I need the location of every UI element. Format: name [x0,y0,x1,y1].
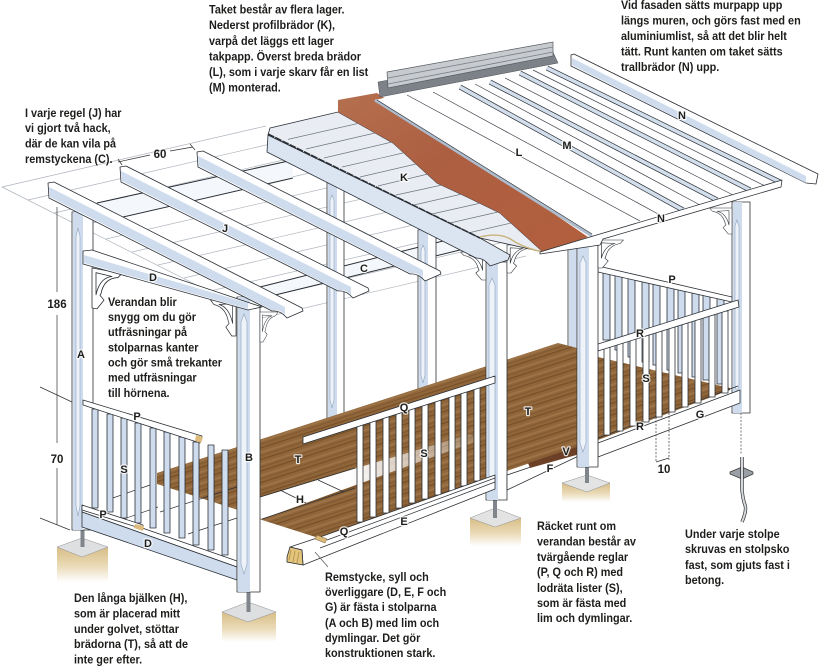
text: roof layers: takpapp. Överst breda brädor [209,50,362,64]
text: railing: verandan består av [537,536,637,549]
part letters: R [636,328,644,340]
part letters: H [296,494,304,506]
text: post shoe: fast, som gjuts fast i [685,560,790,572]
text: facade [621,0,801,74]
dimension 60: 60 [154,149,166,161]
text: post shoe: skruvas en stolpsko [685,544,789,556]
foundation block: middle [470,498,521,546]
part letters: L [516,147,523,159]
text: railing: lodräta lister (S), [537,583,623,595]
text: railing: tvärgående reglar [537,552,629,564]
text: roof layers: Nederst profilbrädor (K), [209,20,335,32]
front cross strip C [260,240,460,297]
top board N [571,54,818,184]
thin board joints [407,70,765,221]
part letters: N [678,110,686,122]
part letters: R [636,421,644,433]
rear cross strip C [97,160,293,217]
part letters: K [400,172,408,184]
text: construction: överliggare (D, E, F och [325,587,446,599]
text: roof layers [209,4,368,95]
deck boards T [157,343,588,540]
right railing with balusters [598,300,740,457]
upper beam D [83,250,262,310]
aluminium flashing and wall felt [378,42,558,97]
footing anchor [730,413,753,522]
text: roof layers: (L), som i varje skarv får en list [209,67,368,79]
text: rafter notches: där de kan vila på [25,138,117,151]
text: facade: längs muren, och görs fast med en [621,15,801,28]
part letters: A [77,349,85,361]
tan edge strip [480,235,543,252]
dimension 10 [656,413,670,476]
post A [72,212,93,530]
text: railing: som är fästa med [537,598,626,610]
roof layer K: profile boards [268,112,543,252]
roof layer L: wide boards [375,60,782,236]
text: long beam H: som är placerad mitt [74,608,180,621]
text: roof layers: (M) monterad. [209,82,281,95]
part letters: Q [400,402,409,414]
left railing with balusters [82,400,228,555]
lower beam D [82,507,237,580]
text: post shoe [685,529,790,587]
dimension 186 and 70: 70 [51,454,63,466]
roof layer: red roofing felt [338,93,588,252]
text: routed posts: utfräsningar på [108,327,188,339]
front railing with balusters [303,376,495,522]
part letters: C [360,263,368,275]
corner brackets [92,208,732,342]
right side deck [598,357,730,440]
rafter J 2 [120,166,369,298]
part letters: P [99,509,107,521]
rail P [598,266,732,302]
rail P bottom [82,505,143,529]
part letters: S [420,448,428,460]
rear posts [327,182,750,420]
text: routed posts: till hörnena. [108,388,170,400]
text: post shoe: Under varje stolpe [685,529,780,541]
text: long beam H: brädorna (T), så att de [74,639,188,651]
text: rafter notches: remstyckena (C). [25,154,112,166]
rail R [598,300,739,351]
text: rafter notches: vi gjort två hack, [25,123,111,135]
part letters: M [562,140,572,152]
text: post shoe: betong. [685,575,724,587]
text: facade: tätt. Runt kanten om taket sätts [621,46,783,59]
part letters: P [668,274,676,286]
text: construction: konstruktionen stark. [325,648,435,660]
text: construction [325,572,446,660]
part letters: B [245,452,253,464]
text: routed posts: och gör små trekanter [108,357,223,370]
text: construction: dymlingar. Det gör [325,633,421,645]
foundation block: right [562,465,610,502]
post B2 front middle [486,262,507,500]
part letters: P [133,411,141,423]
leader line [315,552,328,567]
part letters: E [400,516,408,528]
text: railing: lim och dymlingar. [537,613,632,625]
part letters: S [642,373,650,385]
part letters: S [120,464,128,476]
timber end [287,547,303,565]
text: railing [537,521,637,625]
text: railing: Räcket runt om [537,521,616,533]
text: construction: G) är fästa i stolparna [325,602,437,614]
text: long beam H: Den långa bjälken (H), [74,593,187,605]
dimension 60 [118,144,195,165]
part letters: T [295,454,302,466]
rafter with roof edge [267,135,510,266]
text: long beam H: under golvet, stöttar [74,624,179,636]
transparent roof plane outline [2,126,526,318]
front sill E and timber [287,475,495,565]
foundation block: left front [222,590,276,642]
beam H gap [238,434,480,519]
text: routed posts: med utfräsningar [108,372,197,385]
small wood end [315,535,327,543]
text: facade: trallbrädor (N) upp. [621,62,719,74]
part letters [77,110,704,550]
text: routed posts [108,297,223,400]
text: long beam H [74,593,188,666]
left floor framing seen through the rail [107,484,237,534]
text: routed posts: stolparnas kanter [108,342,199,355]
eave board N [540,180,782,254]
side sill F and plank V [507,443,588,490]
rail Q [303,376,495,444]
text: facade: aluminiumlist, så att det blir helt [621,31,787,43]
part letters: V [562,446,570,458]
dimension 186 and 70 [40,207,72,530]
text: roof layers: Taket består av flera lager. [209,4,345,17]
part letters: D [144,538,152,550]
part letters: T [525,406,532,418]
rafter J 3 [197,151,441,281]
part letters: G [696,409,704,421]
text: construction: (A och B) med lim och [325,618,439,630]
text: rafter notches [25,108,122,166]
part letters: F [547,463,554,475]
dimension 10: 10 [658,464,670,476]
foundation block: left rear [57,530,108,582]
part letters: N [657,213,665,225]
text: construction: Remstycke, syll och [325,572,429,584]
right front post [577,240,598,467]
right back railing [598,266,732,384]
text: rafter notches: I varje regel (J) har [25,108,122,120]
text: railing: (P, Q och R) med [537,567,623,579]
rail P top [83,400,202,443]
dimension 186 and 70: 186 [47,299,67,311]
part letters: J [222,223,228,235]
post B [237,297,260,592]
text: routed posts: snygg om du gör [108,312,197,324]
part letters: Q [340,526,349,538]
text: routed posts: Verandan blir [108,297,177,309]
rafter J 1 [48,182,303,318]
list M ribs [460,68,780,210]
part letters: D [149,272,157,284]
text: roof layers: varpå det läggs ett lager [209,36,334,48]
